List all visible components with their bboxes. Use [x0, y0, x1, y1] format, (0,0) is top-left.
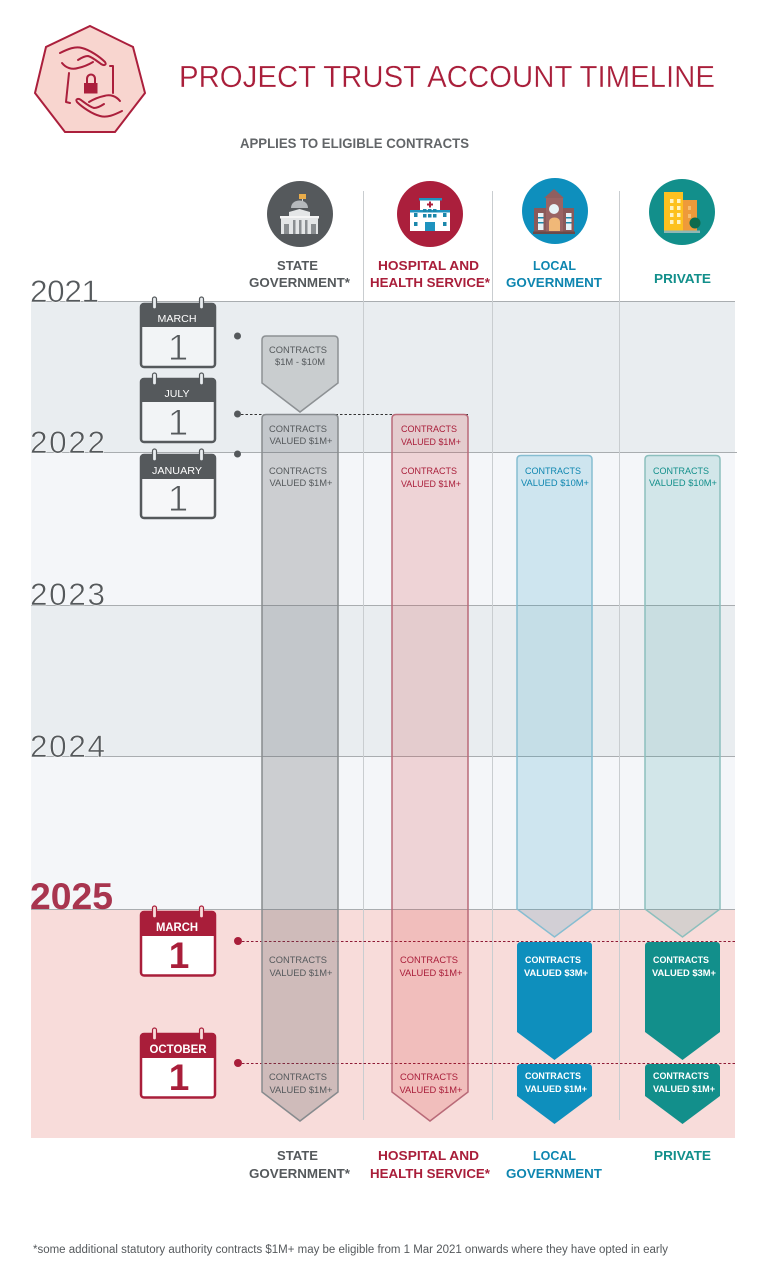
bar: hospital and health service $1M+: CONTRACTS	[400, 1072, 458, 1083]
year labels: 2024	[30, 728, 105, 764]
subheading: APPLIES TO ELIGIBLE CONTRACTS	[240, 135, 469, 151]
calendar: July 1 2021: 1	[168, 402, 188, 443]
bar: hospital and health service $1M+: VALUED $1M+	[400, 1085, 463, 1096]
date markers and dotted guide lines	[234, 332, 737, 1067]
icon: hands protecting padlock	[35, 26, 145, 132]
bar: hospital and health service $1M+: VALUED $1M+	[401, 479, 461, 490]
bar: hospital and health service $1M+: VALUED $1M+	[401, 437, 461, 448]
column headings: bottom: GOVERNMENT*	[249, 1167, 350, 1181]
bar: state government $1M+: VALUED $1M+	[270, 478, 333, 489]
icon: private office buildings	[649, 179, 715, 245]
bar: state government $1M+	[262, 414, 338, 1121]
column headings: bottom: STATE	[277, 1149, 318, 1163]
column headings: bottom	[249, 1149, 711, 1181]
bar: state government $1M+: VALUED $1M+	[270, 1085, 333, 1096]
bar: private $3M+: VALUED $3M+	[652, 968, 716, 979]
column headings: top: HEALTH SERVICE*	[370, 276, 490, 290]
timeline year bands	[31, 191, 737, 1138]
bar: private $3M+: CONTRACTS	[653, 955, 710, 966]
calendar: January 1 2022	[140, 449, 216, 519]
bar: local government $3M+: CONTRACTS	[525, 955, 582, 966]
bar: hospital and health service $1M+	[392, 414, 468, 1121]
bar: local government $10M+: CONTRACTS	[525, 466, 581, 477]
year labels	[30, 273, 113, 917]
bar: local government $1M+	[517, 1064, 592, 1124]
calendar: October 1 2025: 1	[169, 1057, 189, 1098]
calendar: March 1 2025: MARCH	[156, 922, 198, 934]
bar: state government $1M-$10M pennant: $1M - $10M	[275, 357, 325, 368]
bar: state government $1M+: CONTRACTS	[269, 424, 327, 435]
calendar: July 1 2021: JULY	[164, 388, 190, 400]
footnote: *some additional statutory authority contracts $1M+ may be eligible from 1 Mar 2021 onwards where they have opted in early	[33, 1244, 668, 1256]
bar: hospital and health service $1M+: CONTRACTS	[401, 424, 457, 435]
bar: local government $3M+: VALUED $3M+	[524, 968, 588, 979]
bar: local government $3M+	[517, 942, 592, 1060]
calendar: October 1 2025	[140, 1028, 216, 1098]
calendar: January 1 2022: JANUARY	[152, 465, 202, 477]
column headings: top: PRIVATE	[654, 272, 711, 286]
bar: private $1M+: CONTRACTS	[653, 1071, 710, 1082]
column headings: top	[249, 259, 711, 290]
bar: local government $10M+: VALUED $10M+	[521, 478, 589, 489]
column headings: top: LOCAL	[533, 259, 576, 273]
calendar: March 1 2021	[140, 297, 216, 368]
calendar: March 1 2025: 1	[169, 935, 189, 976]
calendar: January 1 2022: 1	[168, 478, 188, 519]
bar: local government $1M+: VALUED $1M+	[525, 1084, 587, 1095]
bar: state government $1M-$10M pennant: CONTRACTS	[269, 345, 327, 356]
year labels: 2025	[30, 876, 113, 917]
bar: hospital and health service $1M+: CONTRACTS	[401, 466, 457, 477]
bar: private $1M+: VALUED $1M+	[653, 1084, 715, 1095]
bar: local government $1M+: CONTRACTS	[525, 1071, 582, 1082]
icon: local government council building	[522, 178, 588, 244]
year labels: 2023	[30, 576, 105, 612]
year labels: 2022	[30, 424, 105, 460]
bar: state government $1M+: VALUED $1M+	[270, 436, 333, 447]
bar: state government $1M+: CONTRACTS	[269, 466, 327, 477]
column headings: bottom: GOVERNMENT	[506, 1167, 602, 1181]
calendar: October 1 2025: OCTOBER	[150, 1044, 207, 1056]
column headings: bottom: PRIVATE	[654, 1149, 711, 1163]
bar: private $10M+	[645, 456, 720, 937]
bar: hospital and health service $1M+: CONTRACTS	[400, 955, 458, 966]
bar: state government $1M-$10M pennant	[262, 336, 338, 412]
calendar: March 1 2021: 1	[168, 327, 188, 368]
bar: private $10M+: VALUED $10M+	[649, 478, 717, 489]
bar: state government $1M+: VALUED $1M+	[270, 968, 333, 979]
bar: hospital and health service $1M+: VALUED $1M+	[400, 968, 463, 979]
bar: private $10M+: CONTRACTS	[653, 466, 709, 477]
column headings: bottom: HOSPITAL AND	[378, 1149, 479, 1163]
column headings: top: STATE	[277, 259, 318, 273]
calendar: March 1 2025	[140, 906, 216, 976]
icon: state government building	[267, 181, 333, 247]
title: PROJECT TRUST ACCOUNT TIMELINE	[179, 60, 715, 94]
bar: state government $1M+: CONTRACTS	[269, 1072, 327, 1083]
calendar: March 1 2021: MARCH	[158, 313, 196, 325]
bar: private $3M+	[645, 942, 720, 1060]
column headings: top: HOSPITAL AND	[378, 259, 479, 273]
column headings: bottom: HEALTH SERVICE*	[370, 1167, 490, 1181]
bar: local government $10M+	[517, 456, 592, 937]
icon: hospital	[397, 181, 463, 247]
bar: state government $1M+: CONTRACTS	[269, 955, 327, 966]
calendar: July 1 2021	[140, 373, 216, 443]
bar: private $1M+	[645, 1064, 720, 1124]
column headings: top: GOVERNMENT	[506, 276, 602, 290]
column headings: bottom: LOCAL	[533, 1149, 576, 1163]
year labels: 2021	[30, 273, 99, 309]
column headings: top: GOVERNMENT*	[249, 276, 350, 290]
